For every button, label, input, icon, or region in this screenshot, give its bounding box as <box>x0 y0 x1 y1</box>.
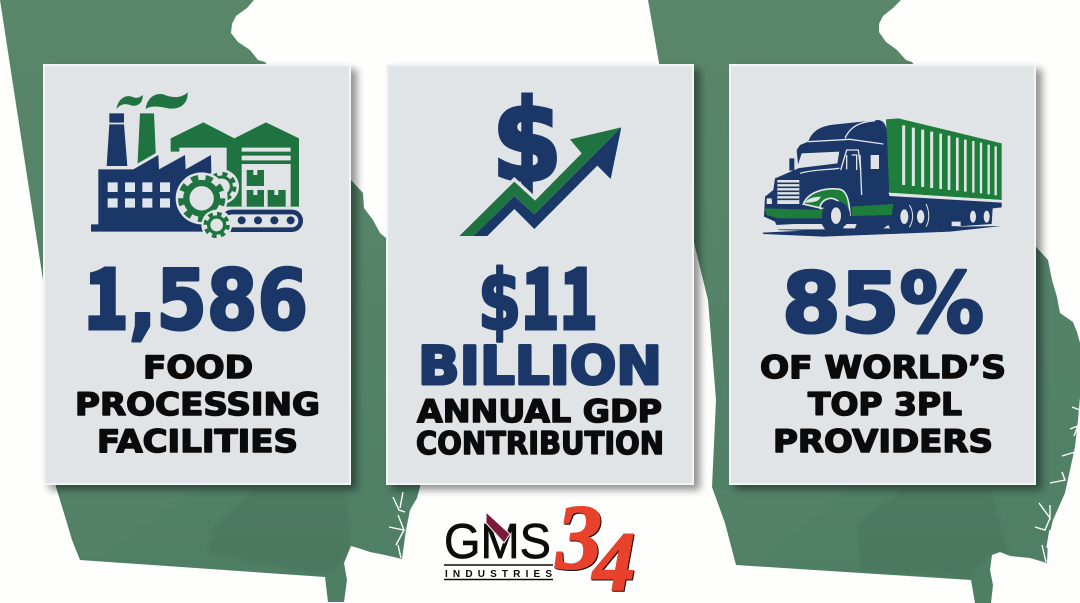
label: food processing facilities <box>75 350 320 460</box>
label: food processing facilities: PROCESSING <box>75 387 320 423</box>
label: food processing facilities: FACILITIES <box>97 424 298 460</box>
icon: dollar sign with rising arrow <box>459 77 621 236</box>
label: food processing facilities: FOOD <box>143 350 253 386</box>
label: of world's top 3PL providers: PROVIDERS <box>773 424 993 460</box>
stat: $11 billion: BILLION <box>418 336 662 397</box>
logo: GMS Industries 34: INDUSTRIES <box>445 569 552 580</box>
icon: factory, warehouse and conveyor <box>91 92 301 240</box>
label: annual GDP contribution: CONTRIBUTION <box>416 426 664 462</box>
panel: annual GDP contribution <box>387 65 693 484</box>
map: Georgia silhouette left <box>0 0 420 602</box>
icon: semi truck <box>763 118 1002 237</box>
label: of world's top 3PL providers: TOP 3PL <box>808 387 962 423</box>
icon: dollar sign with rising arrow: $ <box>492 77 562 207</box>
logo: GMS Industries 34: 3 <box>555 486 602 588</box>
panel: food processing facilities <box>44 65 350 484</box>
label: annual GDP contribution <box>416 394 664 462</box>
stat: 1,586: 1,586 <box>84 233 308 354</box>
label: of world's top 3PL providers: OF WORLD’S <box>760 350 1006 386</box>
logo: GMS Industries 34 <box>444 486 635 603</box>
stat: $11 billion: $11 <box>478 233 598 354</box>
stat: $11 billion <box>418 233 662 397</box>
logo: GMS Industries 34: GMS <box>444 515 551 569</box>
map: Georgia silhouette right <box>648 0 1080 603</box>
panel: top 3PL providers <box>730 65 1035 484</box>
label: annual GDP contribution: ANNUAL GDP <box>417 394 662 430</box>
stat: 85%: 85% <box>782 255 984 352</box>
label: of world's top 3PL providers <box>760 350 1006 460</box>
